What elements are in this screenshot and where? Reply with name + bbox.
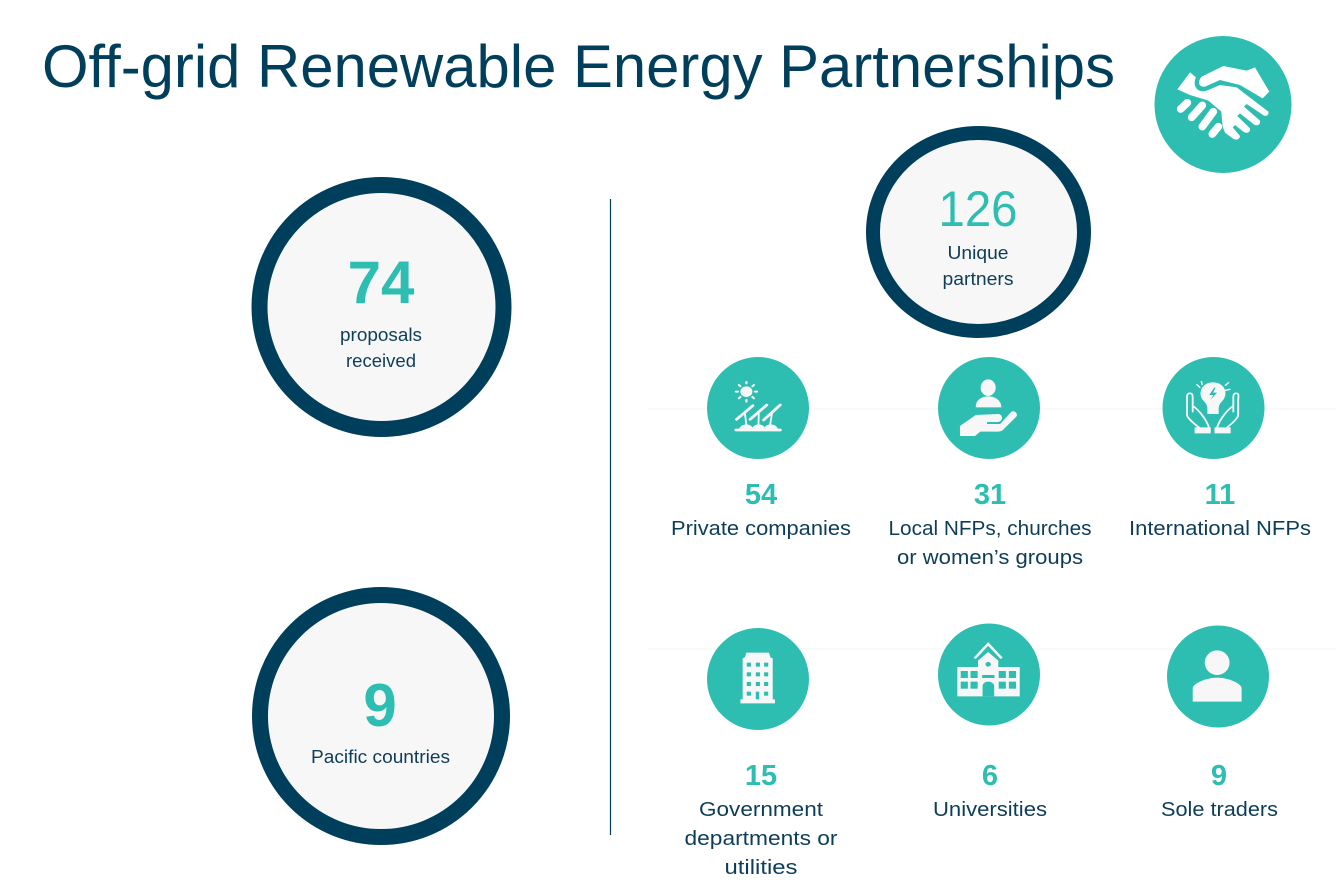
stat circle: Pacific countries [260,595,502,837]
stat circle: Pacific countries: Pacific countries [311,746,450,767]
stat: universities [933,760,1047,821]
stat: international NFPs: 11 [1205,479,1235,511]
icon: handshake [1154,36,1292,173]
stat: local NFPs: or women’s groups [897,547,1083,569]
stat: local NFPs: Local NFPs, churches [888,518,1092,540]
stat: local NFPs [888,479,1092,569]
stat: sole traders [1161,760,1278,821]
title: Off-grid Renewable Energy Partnerships [42,33,1115,100]
stat: universities: Universities [933,799,1047,821]
stat: private companies [671,479,851,540]
icon: office building [707,628,809,730]
vertical divider [610,199,612,835]
icon: person [1167,626,1269,728]
stat: universities: 6 [982,760,998,792]
stat circle: proposals received: 74 [348,249,415,316]
icon: university [938,624,1040,726]
stat: local NFPs: 31 [974,479,1006,511]
stat circle: proposals received [260,185,504,429]
stat: sole traders: Sole traders [1161,799,1278,821]
stat circle: proposals received: proposals [340,324,422,345]
stat circle: unique partners: partners [942,268,1014,289]
stat circle: unique partners: Unique [948,242,1008,263]
stat: government: utilities [724,857,798,879]
stat: international NFPs: International NFPs [1129,518,1311,540]
stat: private companies: Private companies [671,518,851,540]
icon: solar panels [707,357,809,459]
stat: government: departments or [684,828,838,850]
stat: government [684,760,838,879]
stat circle: Pacific countries: 9 [363,672,397,739]
stat circle: unique partners [873,133,1084,331]
icon: hand holding person [938,357,1040,459]
stat: government: 15 [745,760,777,792]
stat circle: proposals received: received [346,350,416,371]
stat: international NFPs [1129,479,1311,540]
stat circle: unique partners: 126 [938,181,1018,237]
stat: government: Government [699,799,823,821]
icon: hands holding light bulb [1162,357,1264,459]
stat: private companies: 54 [745,479,777,511]
stat: sole traders: 9 [1211,760,1227,792]
